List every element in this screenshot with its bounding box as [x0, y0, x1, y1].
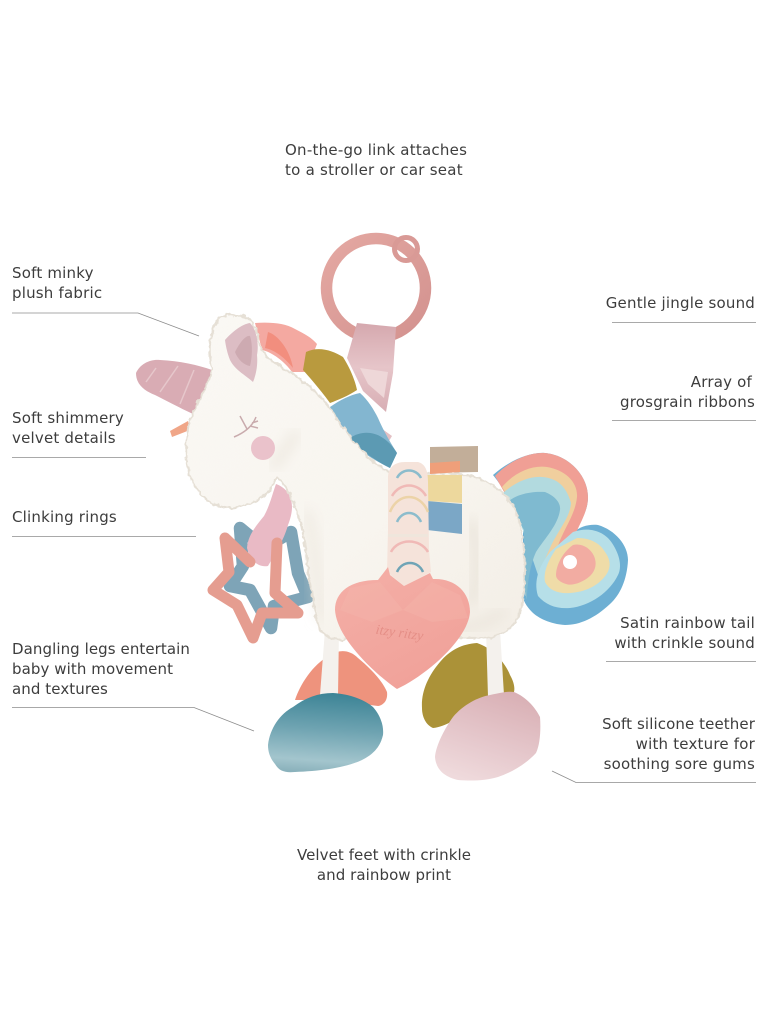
label: tail: with crinkle sound: [614, 634, 755, 652]
small pink ruffle behind mane: [376, 426, 392, 446]
silicone heart teether: itzy ritzy: [375, 623, 425, 644]
fur shading: [272, 432, 505, 630]
horn and small orange tag: [136, 360, 212, 437]
label: minky: [12, 264, 102, 302]
ribbon tags: [427, 446, 478, 534]
velvet ribbon at neck: [247, 484, 292, 566]
rainbow print ribbon: [387, 462, 431, 586]
label: dangling legs: [12, 640, 190, 698]
label: jingle: Gentle jingle sound: [606, 294, 755, 312]
eye and cheek: [234, 416, 275, 460]
leader lines: [12, 313, 756, 782]
label: link: [285, 141, 467, 179]
label: ribbons: grosgrain ribbons: [620, 393, 755, 411]
silicone heart teether: [335, 567, 470, 689]
label: dangling legs: baby with movement: [12, 660, 173, 678]
clinking star: blue ring: [230, 528, 308, 628]
ribbon loop: [347, 323, 396, 412]
label: feet: and rainbow print: [317, 866, 451, 884]
label: teether: Soft silicone teether: [602, 715, 755, 733]
icon: link ring: [326, 238, 426, 338]
label: link: to a stroller or car seat: [285, 161, 463, 179]
label: ribbons: [620, 373, 755, 411]
tail: satin rainbow: [493, 453, 628, 625]
head and body plush: [186, 315, 525, 640]
label: tail: Satin rainbow tail: [620, 614, 755, 632]
dangling legs: [320, 630, 504, 697]
label: velvet details: [12, 409, 124, 447]
velvet feet: [268, 692, 540, 781]
back feet: coral and gold: [295, 643, 514, 728]
ear: [225, 323, 258, 382]
label: minky: Soft minky: [12, 264, 94, 282]
label: teether: with texture for: [636, 735, 755, 753]
label: rings: Clinking rings: [12, 508, 117, 526]
label: feet: [297, 846, 471, 884]
clinking star: pink ring: [213, 538, 298, 638]
label: dangling legs: Dangling legs entertain: [12, 640, 190, 658]
label: teether: [602, 715, 755, 773]
label: velvet details: velvet details: [12, 429, 116, 447]
label: feet: Velvet feet with crinkle: [297, 846, 471, 864]
label: tail: [614, 614, 755, 652]
label: link: On-the-go link attaches: [285, 141, 467, 159]
label: minky: plush fabric: [12, 284, 102, 302]
label: dangling legs: and textures: [12, 680, 108, 698]
label: teether: soothing sore gums: [604, 755, 755, 773]
label: velvet details: Soft shimmery: [12, 409, 124, 427]
mane ribbons: [255, 323, 397, 468]
label: ribbons: Array of: [691, 373, 752, 391]
